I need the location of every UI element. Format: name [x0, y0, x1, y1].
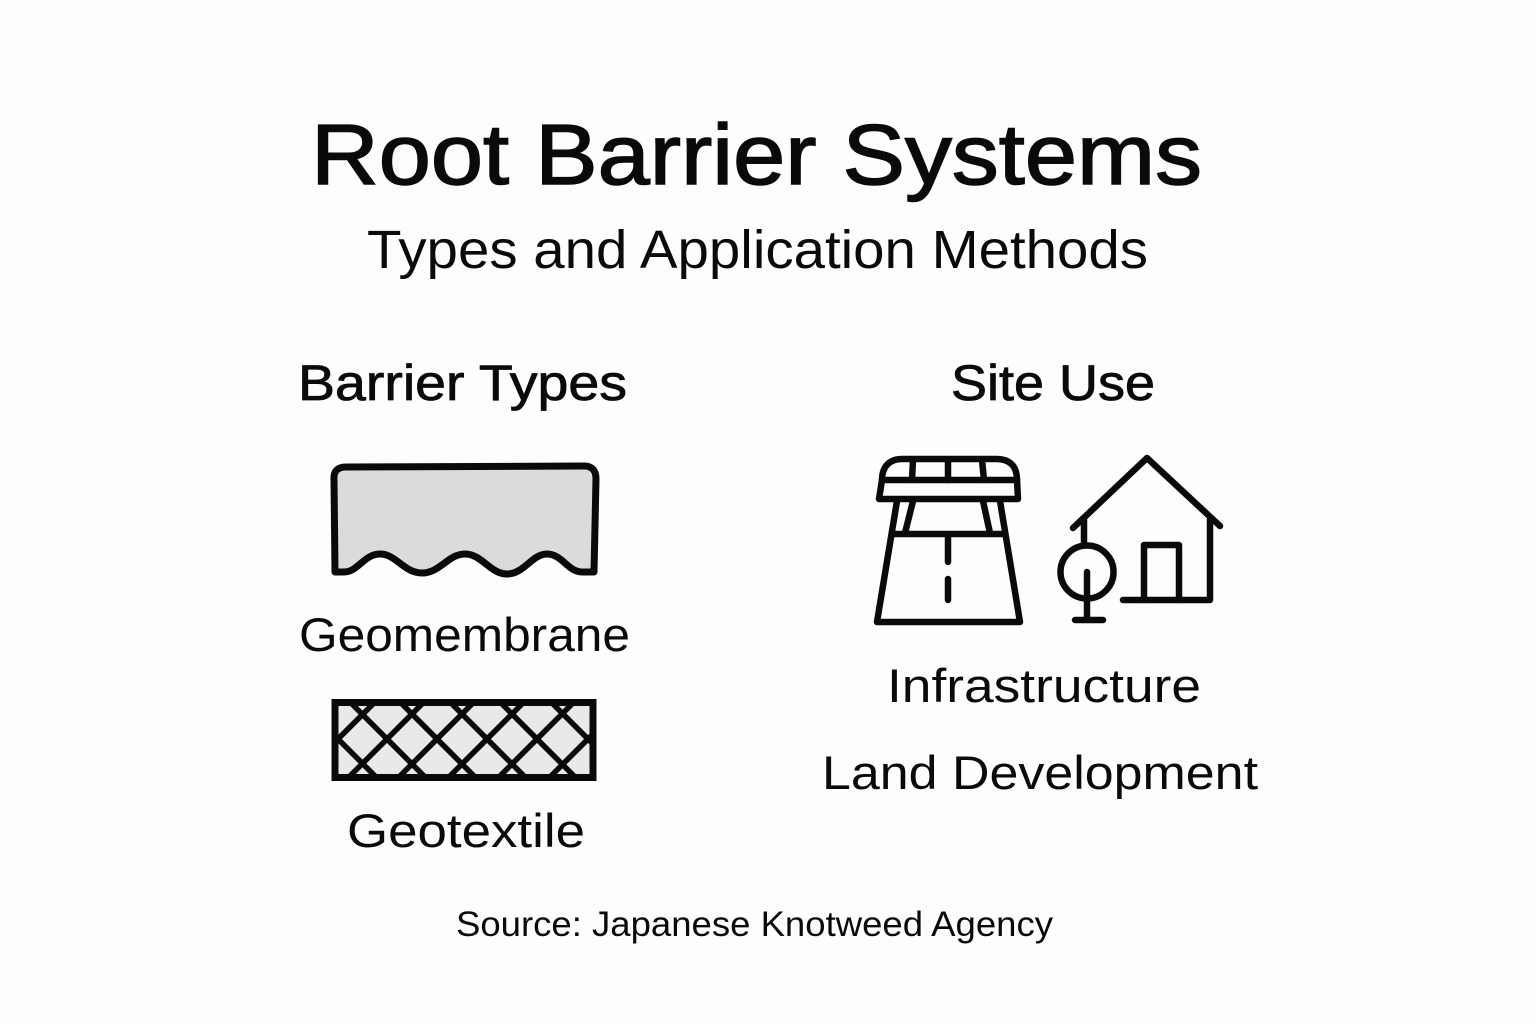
label: land development: Land Development	[822, 746, 1258, 799]
label: geotextile: Geotextile	[347, 804, 585, 857]
panel: site use	[822, 355, 1258, 799]
icon: geotextile	[332, 699, 596, 781]
label: geomembrane: Geomembrane	[299, 608, 630, 661]
heading: site use: Site Use	[951, 355, 1155, 411]
subtitle: Types and Application Methods	[367, 220, 1148, 280]
heading: barrier types: Barrier Types	[298, 355, 627, 411]
panel: barrier types	[302, 363, 628, 848]
icon: road with overhead gantry	[877, 459, 1020, 622]
icon: house and tree	[1060, 458, 1220, 620]
label: infrastructure: Infrastructure	[887, 659, 1201, 712]
source note: Source: Japanese Knotweed Agency	[456, 905, 1054, 944]
icon: geomembrane	[334, 466, 596, 574]
title: Root Barrier Systems	[311, 108, 1202, 203]
